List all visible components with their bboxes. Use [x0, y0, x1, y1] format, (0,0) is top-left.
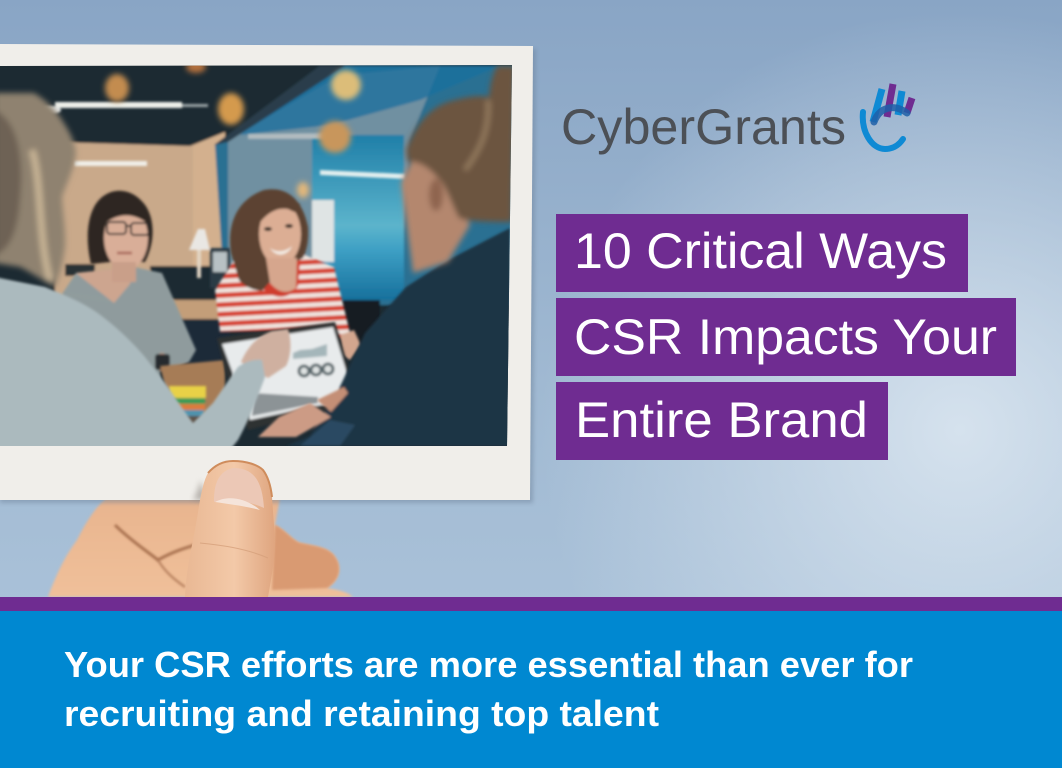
- title line 2: CSR Impacts Your: [574, 309, 997, 365]
- footer subtitle: recruiting and retaining top talent: [64, 693, 659, 734]
- icon: hand behind the card: [48, 498, 353, 597]
- desk, shirt and woman in red stripes: [160, 189, 361, 425]
- person in foreground left: [0, 93, 290, 450]
- office background: [0, 60, 520, 450]
- title: [556, 214, 1016, 460]
- icon: thumb over the card: [185, 461, 275, 597]
- lamp and monitor: [189, 229, 230, 288]
- footer subtitle: Your CSR efforts are more essential than ever for: [64, 644, 913, 685]
- logo wordmark: CyberGrants: [561, 99, 846, 155]
- purple divider band: [0, 597, 1062, 611]
- polaroid card: [0, 44, 536, 597]
- logo: CyberGrants: [561, 84, 912, 155]
- photo: office meeting: [0, 60, 520, 450]
- person in foreground right: [258, 66, 515, 446]
- title line 3: Entire Brand: [575, 392, 868, 448]
- tablet with charts: [217, 322, 353, 430]
- bokeh lamps: [105, 61, 361, 198]
- title line 3: [556, 382, 888, 460]
- woman with glasses: [62, 191, 196, 400]
- ceiling lights: [39, 102, 405, 179]
- title line 2: [556, 298, 1016, 376]
- footer banner: [0, 611, 1062, 768]
- title line 1: 10 Critical Ways: [574, 223, 947, 279]
- title line 1: [556, 214, 968, 292]
- sticky notes: [168, 384, 208, 424]
- logo icon: hand mark: [863, 84, 912, 149]
